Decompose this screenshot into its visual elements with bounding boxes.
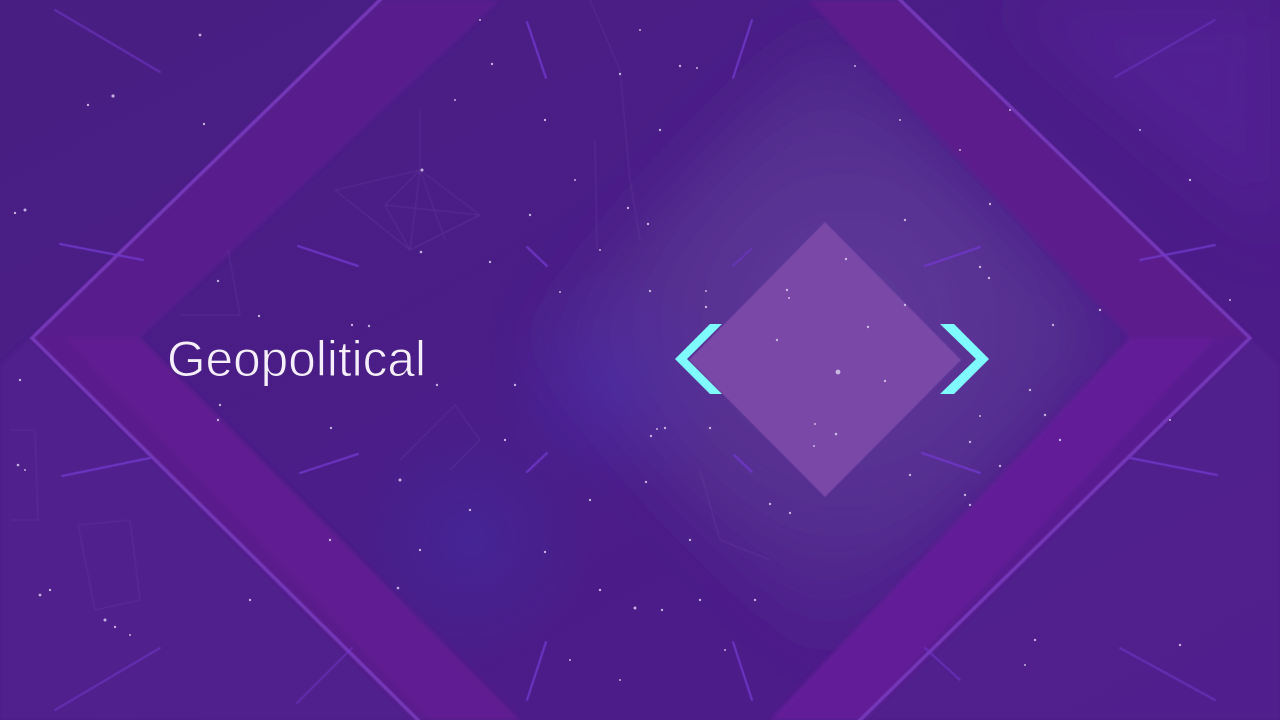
left cyan chevron	[675, 324, 722, 394]
right cyan chevron	[940, 324, 989, 394]
title text: Geopolitical: Geopolitical	[167, 331, 426, 387]
center diamond	[689, 222, 961, 497]
faint network lines	[10, 0, 770, 610]
